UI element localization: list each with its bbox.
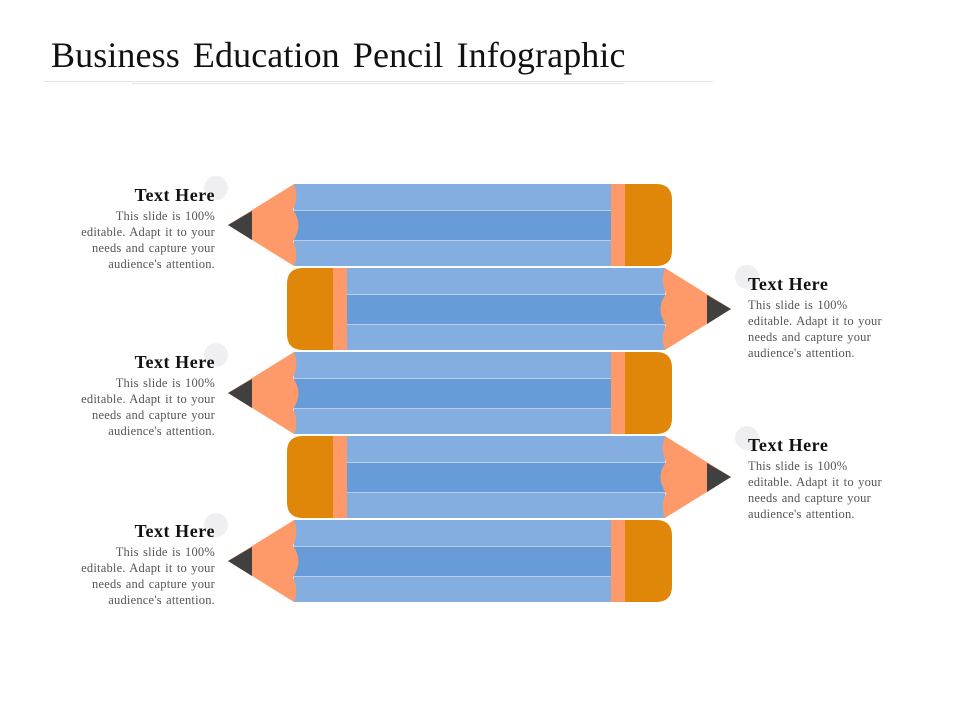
text block 4: Text Here — [748, 435, 828, 455]
pencil 2 — [287, 268, 731, 350]
text block 1: needs and capture your — [92, 241, 215, 255]
pencil 3 — [228, 352, 672, 434]
text block 2: needs and capture your — [748, 330, 871, 344]
text block 1 — [81, 185, 215, 271]
icon: dot 1 — [204, 176, 228, 200]
text block 2 — [748, 274, 882, 360]
text block 2: This slide is 100% — [748, 298, 847, 312]
text block 3: editable. Adapt it to your — [81, 392, 215, 406]
title: Business Education Pencil Infographic — [51, 35, 626, 75]
text block 3: needs and capture your — [92, 408, 215, 422]
text block 1: audience's attention. — [108, 257, 215, 271]
pencil 1 — [228, 184, 672, 266]
pencil 4 — [287, 436, 731, 518]
text block 5: Text Here — [135, 521, 215, 541]
text block 4: editable. Adapt it to your — [748, 475, 882, 489]
icon: dot 4 — [735, 426, 759, 450]
text block 5: needs and capture your — [92, 577, 215, 591]
text block 2: Text Here — [748, 274, 828, 294]
text block 3 — [81, 352, 215, 438]
text block 4: This slide is 100% — [748, 459, 847, 473]
text block 5: audience's attention. — [108, 593, 215, 607]
text block 5 — [81, 521, 215, 607]
text block 3: audience's attention. — [108, 424, 215, 438]
icon: dot 5 — [204, 513, 228, 537]
pencil 5 — [228, 520, 672, 602]
text block 4: needs and capture your — [748, 491, 871, 505]
text block 4: audience's attention. — [748, 507, 855, 521]
text block 1: This slide is 100% — [116, 209, 215, 223]
icon: dot 3 — [204, 343, 228, 367]
text block 1: editable. Adapt it to your — [81, 225, 215, 239]
icon: dot 2 — [735, 265, 759, 289]
text block 1: Text Here — [135, 185, 215, 205]
text block 5: editable. Adapt it to your — [81, 561, 215, 575]
text block 2: audience's attention. — [748, 346, 855, 360]
text block 5: This slide is 100% — [116, 545, 215, 559]
text block 3: This slide is 100% — [116, 376, 215, 390]
text block 4 — [748, 435, 882, 521]
text block 2: editable. Adapt it to your — [748, 314, 882, 328]
text block 3: Text Here — [135, 352, 215, 372]
